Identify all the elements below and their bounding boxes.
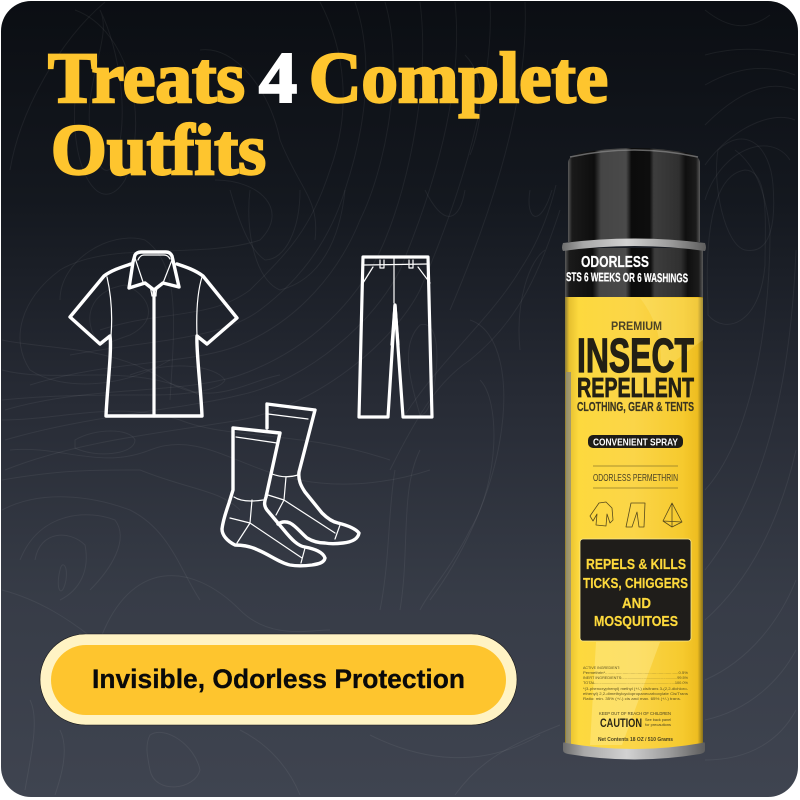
can product name: [577, 319, 694, 414]
title: Treats: [48, 38, 245, 118]
can panel: repels and kills: REPELS & KILLS: [586, 557, 686, 573]
icon: pants: [359, 257, 432, 417]
can ingredients text: INERT INGREDIENTS:....................................................99.5%: [583, 676, 688, 680]
can caution block: Net Contents 18 OZ / 510 Grams: [598, 737, 673, 743]
can top text: STS 6 WEEKS OR 6 WASHINGS: [566, 270, 688, 285]
callout pill: Invisible, Odorless Protection: [40, 634, 517, 725]
can top text: ODORLESS: [581, 254, 649, 271]
can caution block: See back panel: [645, 717, 671, 722]
can icons: jacket, pants, tent: [590, 502, 682, 527]
can subtitle: odorless permethrin: [593, 466, 678, 488]
can caution block: for precautions: [645, 722, 671, 727]
can caution block: KEEP OUT OF REACH OF CHILDREN: [599, 711, 671, 716]
can ingredients text: TOTAL..........................................................................100.0%: [583, 681, 688, 685]
can ingredients text: [583, 666, 688, 701]
can cap and shoulder: [562, 148, 706, 300]
can top text: [566, 254, 688, 285]
can bottom rim: [563, 742, 705, 760]
title: [48, 38, 608, 190]
can panel: repels and kills: TICKS, CHIGGERS: [583, 576, 688, 592]
product: insect repellent spray can: [562, 148, 706, 760]
title: Outfits: [51, 110, 266, 190]
can ingredients text: Permethrin*...............................................................0.5%: [583, 671, 688, 675]
icon: shirt: [70, 252, 237, 416]
can product name: INSECT: [577, 330, 694, 383]
title: 4: [259, 38, 297, 118]
can panel: repels and kills: AND: [622, 596, 651, 612]
can caution block: CAUTION: [600, 716, 642, 730]
can ingredients text: *(3-phenoxyphenyl) methyl (+/-) cis/trans 3-(2,2-dichloro-: [583, 687, 688, 691]
can ingredients text: Ratio: min. 35% (+/-) cis and max. 65% (+/-) trans.: [583, 697, 681, 701]
can product name: CLOTHING, GEAR & TENTS: [577, 400, 694, 414]
can panel: repels and kills: [580, 539, 691, 641]
can body label: [565, 297, 703, 749]
can badge: convenient spray: CONVENIENT SPRAY: [593, 438, 678, 448]
title: Complete: [309, 38, 608, 118]
can caution block: [598, 711, 673, 743]
can product name: PREMIUM: [611, 319, 662, 333]
can ingredients text: ACTIVE INGREDIENT:: [583, 666, 620, 670]
can product name: REPELLENT: [577, 372, 694, 403]
icon: socks: [222, 404, 359, 566]
can ingredients text: ethenyl) 2,2-dimethylcyclopropanecarboxylate Cis/Trans: [583, 692, 688, 696]
can panel: repels and kills: MOSQUITOES: [594, 614, 678, 630]
callout pill: Invisible, Odorless Protection: Invisible, Odorless Protection: [92, 664, 465, 694]
can subtitle: odorless permethrin: ODORLESS PERMETHRIN: [593, 473, 678, 484]
